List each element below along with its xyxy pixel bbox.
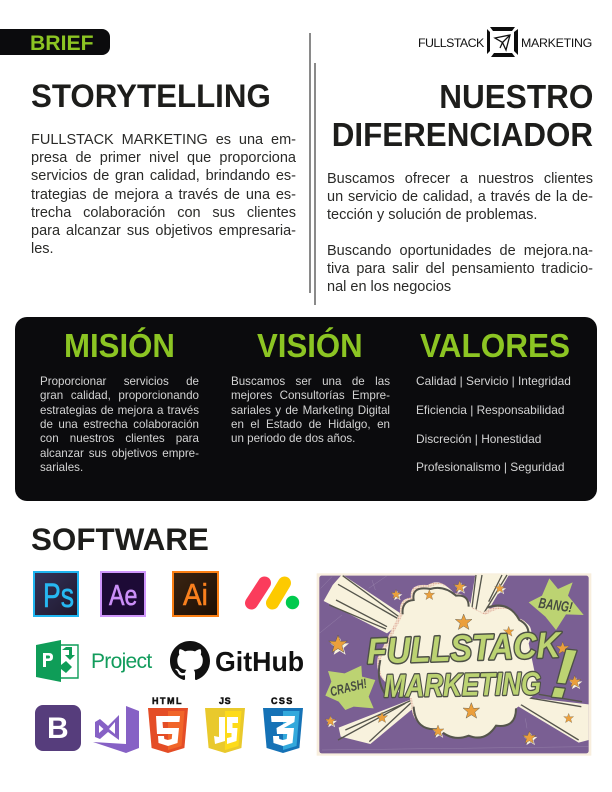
text: mision body: estrategias de mejora a través xyxy=(40,404,199,417)
text: vision body: un periodo de dos años. xyxy=(231,432,355,445)
logo word fullstack: FULLSTACK xyxy=(418,36,484,50)
logo: fullstack marketing xyxy=(418,27,592,57)
text: diferenciador paragraph 2: Buscando oportunidades de mejora.na- xyxy=(327,243,593,259)
text: vision body xyxy=(231,375,390,445)
icon: after effects xyxy=(100,571,146,617)
project wordmark: Project xyxy=(91,650,151,673)
text: mision body: de una estrecha colaboración xyxy=(40,418,199,431)
heading line nuestro: NUESTRO xyxy=(439,78,593,115)
icon: css3 xyxy=(263,696,303,753)
text: diferenciador paragraph 2: tiva para salir del pensamiento tradicio- xyxy=(327,261,593,277)
heading: valores: VALORES xyxy=(420,327,570,364)
heading: nuestro diferenciador xyxy=(332,78,593,153)
icon: monday xyxy=(245,576,300,610)
text: diferenciador paragraph 1: Buscamos ofrecer a nuestros clientes xyxy=(327,171,593,187)
comic title: MARKETING xyxy=(383,665,541,704)
vertical divider second xyxy=(314,63,316,305)
heading: vision: VISIÓN xyxy=(257,327,363,364)
logo mark xyxy=(487,27,518,57)
heading: storytelling: STORYTELLING xyxy=(31,77,271,114)
text: mision body: alcanzar sus objetivos empre- xyxy=(40,447,199,460)
text: diferenciador paragraph 1 xyxy=(327,171,593,223)
text: storytelling body: les. xyxy=(31,241,54,257)
burst: bang xyxy=(529,578,584,630)
panel: mision vision valores xyxy=(15,317,597,501)
text: diferenciador paragraph 2 xyxy=(327,243,593,295)
text: storytelling body xyxy=(31,132,296,257)
text: storytelling body: presa de primer nivel que proporciona xyxy=(31,150,296,166)
text: valores list: Discreción | Honestidad xyxy=(416,432,541,446)
icon: github xyxy=(170,641,304,680)
burst: bang: BANG! xyxy=(537,596,573,616)
icon: illustrator xyxy=(172,571,219,617)
text: valores list: Calidad | Servicio | Integridad xyxy=(416,374,571,388)
text: mision body: con nuestros clientes para xyxy=(40,432,199,445)
text: storytelling body: trategias de mejora a través de una es- xyxy=(31,187,296,203)
icon: html5 xyxy=(148,696,188,753)
text: vision body: sariales y de Marketing Digital xyxy=(231,404,390,417)
text: diferenciador paragraph 2: nal en los negocios xyxy=(327,279,451,295)
icon: visual studio xyxy=(93,706,139,753)
html label: HTML xyxy=(152,696,183,706)
github wordmark: GitHub xyxy=(215,646,304,677)
comic title: FULLSTACK xyxy=(366,624,564,672)
text: vision body: Buscamos ser una de las xyxy=(231,375,390,388)
comic title: ! xyxy=(548,634,579,714)
icon: bootstrap: B xyxy=(47,712,69,745)
logo word marketing: MARKETING xyxy=(521,36,592,50)
explosion cloud xyxy=(377,582,539,738)
illustration: comic explosion xyxy=(316,573,592,756)
vertical divider xyxy=(309,33,311,293)
burst: crash: CRASH! xyxy=(328,676,369,699)
explosion rays xyxy=(324,574,589,744)
icon: photoshop: Ps xyxy=(43,577,74,615)
text: mision body: sariales. xyxy=(40,461,83,474)
text: diferenciador paragraph 1: un servicio de calidad, a través de la de- xyxy=(327,189,593,205)
burst: crash xyxy=(325,666,375,710)
icon: javascript xyxy=(205,696,245,753)
text: vision body: mejores Consultorías Empre- xyxy=(231,389,390,402)
stars shadow xyxy=(326,582,582,745)
comic title xyxy=(366,624,579,714)
icon: illustrator: Ai xyxy=(183,577,208,612)
text: diferenciador paragraph 1: tección y solución de problemas. xyxy=(327,207,537,223)
icon: bootstrap xyxy=(35,705,81,751)
stars xyxy=(325,581,581,743)
text: storytelling body: FULLSTACK MARKETING es una em- xyxy=(31,132,296,148)
text: storytelling body: servicios de gran calidad, brindando es- xyxy=(31,168,296,184)
icon: ms project xyxy=(36,640,152,682)
heading: software: SOFTWARE xyxy=(31,522,209,557)
js label: JS xyxy=(219,696,231,706)
brief tab xyxy=(0,29,110,55)
heading line diferenciador: DIFERENCIADOR xyxy=(332,116,593,153)
text: storytelling body: trecha colaboración con sus clientes xyxy=(31,205,296,221)
icon: after effects: Ae xyxy=(109,580,137,612)
text: vision body: en el Estado de Hidalgo, en xyxy=(231,418,390,431)
text: valores list: Profesionalismo | Seguridad xyxy=(416,460,564,474)
text: valores list xyxy=(416,374,571,474)
heading: mision: MISIÓN xyxy=(64,327,175,364)
brief label: BRIEF xyxy=(30,32,94,55)
text: mision body: Proporcionar servicios de xyxy=(40,375,199,388)
text: valores list: Eficiencia | Responsabilidad xyxy=(416,403,565,417)
text: mision body xyxy=(40,375,199,474)
text: mision body: gran calidad, proporcionando xyxy=(40,389,199,402)
icon: photoshop xyxy=(33,571,79,617)
css label: CSS xyxy=(271,696,294,706)
text: storytelling body: para alcanzar sus objetivos empresaria- xyxy=(31,223,296,239)
